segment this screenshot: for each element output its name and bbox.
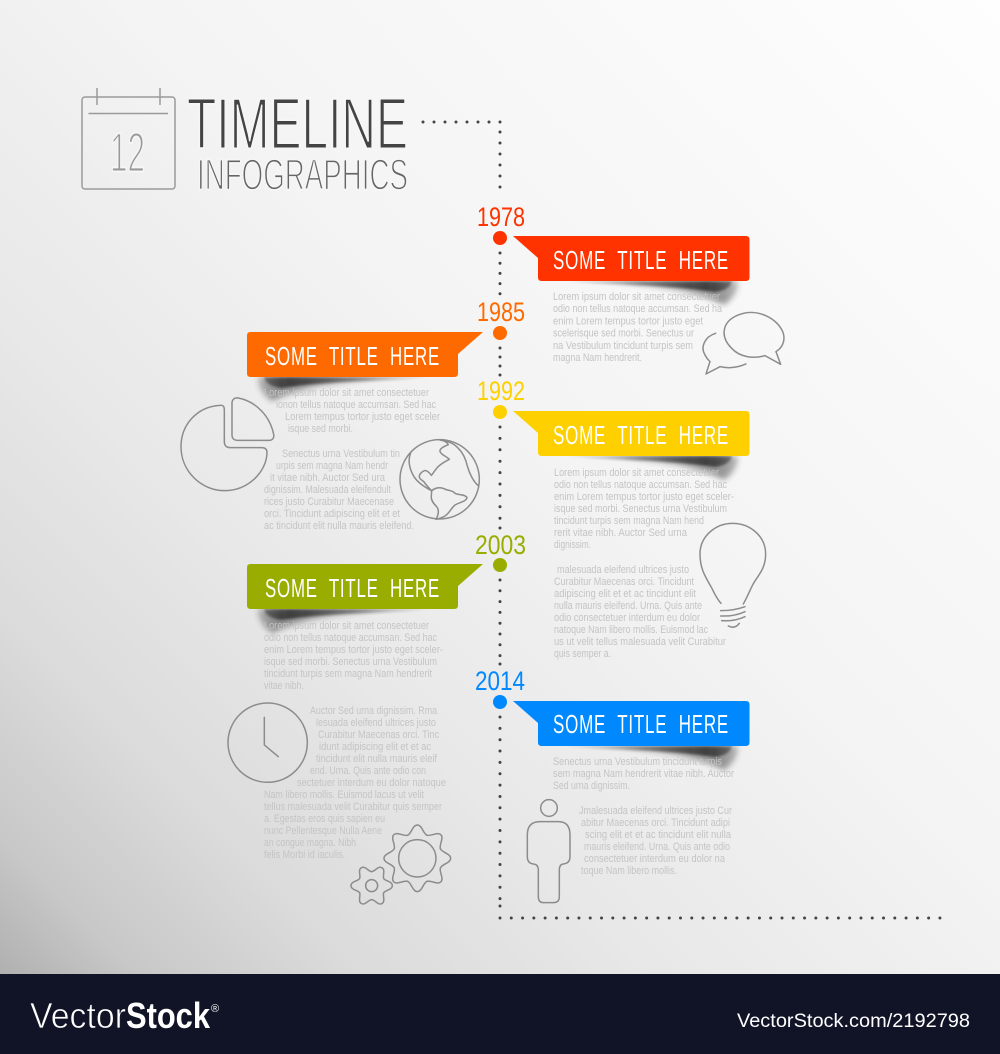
footer bar	[0, 974, 1000, 1054]
text block 2003: lesuada eleifend ultrices justo	[316, 717, 436, 729]
text block 2003: tincidunt elit nulla mauris eleif	[316, 753, 438, 765]
text block 2003: tincidunt turpis sem magna Nam hendrerit	[264, 668, 432, 680]
text block 2003: sectetuer interdum eu dolor natoque	[297, 777, 446, 789]
banner 1992: SOME TITLE HERE	[553, 420, 729, 450]
text block 1985: dignissim. Malesuada eleifendult	[264, 484, 391, 496]
text block 1992: us ut velit tellus malesuada velit Curabitur	[554, 636, 726, 648]
footer logo: ®	[211, 1003, 219, 1015]
text block 1985: Lorem ipsum dolor sit amet consectetuer	[264, 387, 429, 399]
text block 1978: na Vestibulum tincidunt turpis sem	[553, 340, 693, 352]
title	[187, 84, 408, 200]
title: TIMELINE	[187, 84, 408, 164]
icon: calendar	[82, 88, 175, 189]
text block 1992: Lorem ipsum dolor sit amet consectetuer	[554, 467, 719, 479]
text block 1992	[554, 467, 734, 660]
text block 1992: quis semper a.	[554, 648, 611, 660]
text block 1985	[264, 387, 440, 532]
text block 1992: dignissim.	[554, 539, 591, 551]
banner 2014	[513, 701, 750, 746]
text block 2003: vitae nibh.	[264, 680, 304, 692]
icon: person	[527, 800, 570, 903]
year 1978 marker: 1978	[477, 202, 525, 232]
text block 2014: toque Nam libero mollis.	[581, 865, 677, 877]
banner 1978	[513, 236, 750, 281]
year 1985 marker	[477, 297, 525, 340]
text block 2003: Auctor Sed urna dignissim. Rma	[310, 705, 438, 717]
text block 1992: nulla mauris eleifend. Urna. Quis ante	[554, 600, 702, 612]
footer logo: Stock	[126, 995, 211, 1036]
banner shadow 2003	[258, 609, 436, 633]
banner 1978: SOME TITLE HERE	[553, 245, 729, 275]
icon: pie chart	[181, 398, 274, 491]
text block 2003: isque sed morbi. Senectus urna Vestibulum	[264, 656, 437, 668]
text block 2014: consectetuer interdum eu dolor na	[584, 853, 726, 865]
icon: calendar: 12	[110, 120, 145, 184]
year 1992 marker: 1992	[477, 376, 525, 406]
text block 2003: Nam libero mollis. Euismod lacus ut velit	[264, 789, 424, 801]
banner shadow 1992	[560, 456, 738, 480]
year 2014 marker	[475, 666, 525, 709]
text block 1978: Lorem ipsum dolor sit amet consectetuer	[553, 291, 720, 303]
banner 1992	[513, 411, 750, 456]
text block 2003: an congue magna. Nibh	[264, 837, 356, 849]
text block 2003: felis Morbi id iaculis.	[264, 849, 345, 861]
year 2003 marker	[475, 530, 526, 572]
text block 1992: rerit vitae nibh. Auctor Sed urna	[554, 527, 688, 539]
text block 2003	[264, 620, 446, 861]
banner shadow 1978	[560, 281, 738, 305]
text block 1992: Curabitur Maecenas orci. Tincidunt	[554, 576, 694, 588]
text block 1985: Lorem tempus tortor justo eget sceler	[285, 411, 440, 423]
dotted timeline line	[423, 122, 941, 918]
text block 1992: enim Lorem tempus tortor justo eget sceler-	[554, 491, 734, 503]
banner shadow 2014	[560, 746, 738, 770]
text block 1992: odio non tellus natoque accumsan. Sed hac	[554, 479, 727, 491]
footer image id: VectorStock.com/2192798	[737, 1011, 970, 1032]
banner 2014: SOME TITLE HERE	[553, 709, 729, 739]
text block 2014: scing elit et et ac tincidunt elit nulla	[585, 829, 732, 841]
year 1985 marker: 1985	[477, 297, 525, 327]
text block 1978: odio non tellus natoque accumsan. Sed ha	[553, 303, 723, 315]
text block 2003: tellus malesuada velit Curabitur quis semper	[264, 801, 442, 813]
text block 1992: adipiscing elit et et ac tincidunt elit	[554, 588, 696, 600]
text block 2014: Senectus urna Vestibulum tincidunt turpis	[553, 756, 722, 768]
text block 2003: nunc Pellentesque Nulla Aene	[264, 825, 382, 837]
text block 2003: odio non tellus natoque accumsan. Sed hac	[264, 632, 437, 644]
text block 1978: magna Nam hendrerit.	[553, 352, 642, 364]
icon: clock	[228, 703, 307, 782]
text block 1992: isque sed morbi. Senectus urna Vestibulum	[554, 503, 727, 515]
text block 2014: Sed urna dignissim.	[553, 780, 630, 792]
year 1992 marker	[477, 376, 525, 419]
year 2014 marker: 2014	[475, 666, 525, 696]
text block 1978: scelerisque sed morbi. Senectus ur	[553, 328, 694, 340]
text block 1985: rices justo Curabitur Maecenase	[264, 496, 394, 508]
year 2003 marker: 2003	[475, 530, 526, 560]
banner 1985	[247, 332, 483, 377]
banner shadow 1985	[258, 377, 436, 401]
text block 2014	[553, 756, 734, 877]
text block 2003: Curabitur Maecenas orci. Tinc	[318, 729, 439, 741]
text block 2014: abitur Maecenas orci. Tincidunt adipi	[581, 817, 730, 829]
text block 2003: Lorem ipsum dolor sit amet consectetuer	[264, 620, 429, 632]
text block 2003: end. Urna. Quis ante odio con	[310, 765, 426, 777]
icon: speech bubbles	[703, 312, 784, 374]
text block 1985: Senectus urna Vestibulum tin	[282, 448, 400, 460]
text block 1992: tincidunt turpis sem magna Nam hend	[554, 515, 704, 527]
text block 1992: natoque Nam libero mollis. Euismod lac	[554, 624, 708, 636]
text block 1985: urpis sem magna Nam hendr	[276, 460, 388, 472]
banner 2003: SOME TITLE HERE	[265, 573, 440, 603]
year 1978 marker	[477, 202, 525, 245]
text block 2014: sem magna Nam hendrerit vitae nibh. Auctor	[553, 768, 734, 780]
title: INFOGRAPHICS	[197, 150, 408, 200]
text block 2003: a. Egestas eros quis sapien eu	[264, 813, 385, 825]
text block 2014: Jmalesuada eleifend ultrices justo Cur	[579, 805, 732, 817]
text block 1992: malesuada eleifend ultrices justo	[557, 564, 689, 576]
text block 1992: odio consectetuer interdum eu dolor	[554, 612, 700, 624]
text block 1985: orci. Tincidunt adipiscing elit et et	[264, 508, 400, 520]
icon: globe	[400, 440, 479, 519]
banner 1985: SOME TITLE HERE	[265, 341, 440, 371]
text block 2014: mauris eleifend. Urna. Quis ante odio	[584, 841, 730, 853]
text block 2003: idunt adipiscing elit et et ac	[319, 741, 431, 753]
text block 1985: it vitae nibh. Auctor Sed ura	[270, 472, 386, 484]
text block 2003: enim Lorem tempus tortor justo eget sceler-	[264, 644, 443, 656]
footer logo	[30, 995, 219, 1036]
icon: light bulb	[700, 523, 766, 627]
banner 2003	[247, 564, 483, 609]
text block 1978	[553, 291, 723, 364]
text block 1985: ionon tellus natoque accumsan. Sed hac	[276, 399, 436, 411]
footer logo: Vector	[30, 995, 126, 1036]
text block 1985: isque sed morbi.	[288, 423, 353, 435]
text block 1978: enim Lorem tempus tortor justo eget	[553, 316, 703, 328]
text block 1985: ac tincidunt elit nulla mauris eleifend.	[264, 520, 414, 532]
icon: gears	[351, 825, 451, 907]
